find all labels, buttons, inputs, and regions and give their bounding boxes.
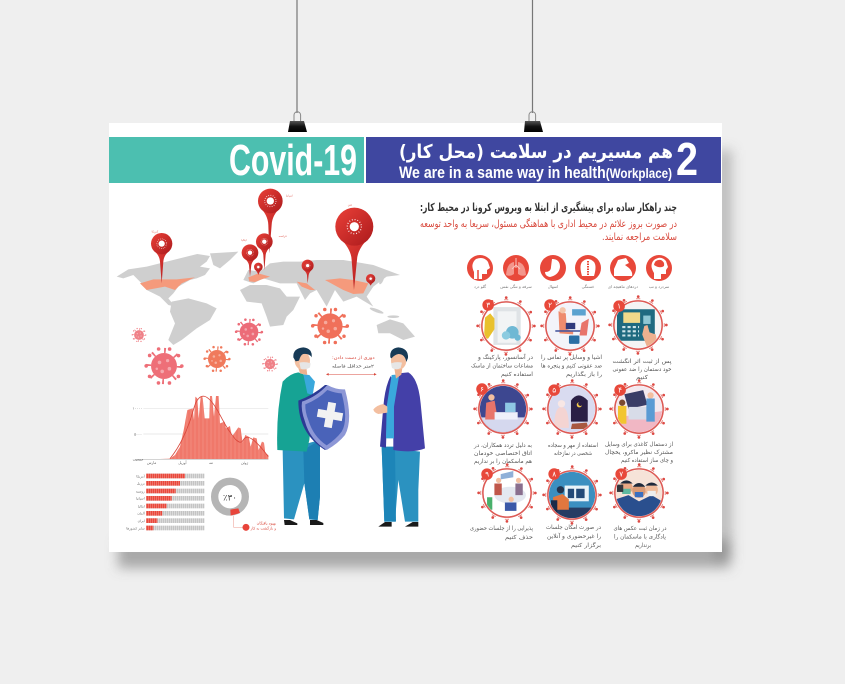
tip 2: disinfect objects: ۲ — [548, 301, 552, 310]
tip 3 caption: استفاده کنیم — [501, 371, 533, 378]
symptom: sore throat: گلو درد — [474, 284, 486, 289]
poster sheet — [109, 123, 722, 552]
horizontal bar chart: آلمان — [137, 512, 146, 516]
symptom: diarrhea — [540, 255, 566, 289]
tip 3 caption: مشاعات ساختمان از ماسک — [471, 362, 533, 370]
header: title: 2 — [676, 133, 698, 185]
world map: چین — [348, 204, 353, 207]
horizontal bar chart: اسپانیا — [136, 497, 145, 501]
tip 2 caption — [541, 355, 602, 378]
world map: اسپانیا — [286, 194, 293, 197]
tip 9 caption — [470, 526, 534, 541]
tip 8: online meeting — [544, 467, 600, 523]
distance note — [326, 355, 377, 376]
symptom: diarrhea: اسهال — [548, 284, 558, 289]
donut chart: و بازگشت به کار — [250, 526, 276, 531]
symptom icons — [467, 255, 672, 289]
illustration: two masked men with shield — [277, 347, 425, 527]
area chart: مه — [209, 461, 213, 465]
symptom: headache and fever — [646, 255, 672, 289]
tip 6: shared office: ۶ — [480, 385, 484, 394]
symptom: cough and shortness of breath — [500, 255, 532, 289]
symptom: cough and shortness of breath: سرفه و تنگی نفس — [500, 284, 532, 289]
tip 5 caption: استفاده از مهر و سجاده — [548, 443, 598, 449]
map pins — [151, 189, 375, 290]
donut chart: بهبود یافتگان — [257, 520, 276, 525]
tip 8: online meeting: ۸ — [552, 470, 556, 479]
tip 5: prayer room: ۵ — [552, 386, 556, 395]
tip 1: fingerprint device: ۱ — [617, 302, 621, 311]
horizontal bar chart: برزیل — [137, 482, 145, 486]
tip 1 caption: کنیم — [636, 374, 648, 381]
header: title: We are in a same way in health(Workplace) — [399, 163, 672, 182]
tip 4: shared kitchen: ۴ — [618, 386, 622, 395]
symptom: fatigue — [575, 255, 601, 289]
tip 4 caption — [605, 441, 673, 464]
tip 9 caption: حذف کنیم — [505, 534, 534, 541]
tip 6 caption: به دلیل تردد همکاران، در — [473, 442, 532, 449]
man on the left — [277, 347, 323, 525]
horizontal bar chart — [126, 474, 205, 530]
tip 4: shared kitchen — [611, 381, 667, 437]
tip 6 caption — [473, 442, 532, 465]
horizontal bar chart: سایر کشورها — [126, 526, 145, 530]
tip 3: elevator: ۳ — [486, 301, 490, 310]
tip 4 caption: و چای ساز استفاده کنیم — [621, 457, 673, 464]
area chart — [132, 396, 268, 465]
world map: ایتالیا — [241, 239, 247, 242]
intro paragraph — [420, 218, 677, 243]
header: title — [366, 133, 721, 185]
symptom: headache and fever: سردرد و تب — [649, 284, 670, 289]
area chart: ژوئن — [241, 461, 249, 465]
tip 5 caption: شخصی در نمازخانه — [554, 451, 592, 457]
symptom: sore throat — [467, 255, 493, 289]
horizontal bar chart: آمریکا — [136, 474, 146, 478]
horizontal bar chart: روسیه — [136, 489, 145, 493]
tip 7: group selfie: ۷ — [619, 470, 623, 479]
intro heading: چند راهکار ساده برای پیشگیری از ابتلا به ویروس کرونا در محیط کار: — [420, 201, 677, 214]
tip 8 caption: در صورت امکان جلسات — [546, 524, 601, 531]
tip 4 caption: از دستمال کاغذی برای وسایل — [605, 441, 673, 448]
tip 1 caption: پس از ثبت اثر انگشت — [612, 357, 672, 365]
tip 5 caption — [548, 443, 598, 457]
tip 2 caption: ضد عفونی کنیم و پنجره ها — [541, 362, 602, 370]
man on the right — [373, 347, 425, 527]
tip 6 caption: اتاق اختصاصی خودمان — [474, 451, 532, 457]
tip 7: group selfie — [611, 465, 667, 521]
virus particles — [132, 309, 347, 384]
distance note: ۲متر حداقل فاصله — [332, 365, 375, 370]
horizontal bar chart: ایران — [138, 519, 145, 523]
horizontal bar chart: ایتالیا — [138, 504, 145, 508]
hanging strings and clips — [288, 0, 543, 132]
donut chart: ٪۳۰ — [223, 494, 237, 504]
area chart: ۱۰۰۰۰ — [132, 406, 142, 410]
tip 3: elevator — [478, 298, 534, 354]
tip 9: no meeting catering — [479, 465, 535, 521]
shield with cross — [298, 385, 349, 450]
tip 7 caption: در زمان ثبت عکس های — [614, 525, 667, 532]
header: title: هم مسیریم در سلامت (محل کار) — [399, 141, 673, 163]
world map — [117, 189, 415, 345]
tip 4 caption: مشترک نظیر ماکرو، یخچال — [605, 449, 673, 456]
header: Covid-19 — [109, 136, 364, 185]
symptom: muscle pain — [608, 255, 638, 289]
tip 7 caption — [614, 525, 667, 549]
donut chart — [215, 481, 276, 531]
area chart: ۵۰۰۰ — [134, 432, 142, 436]
symptom: muscle pain: دردهای ماهیچه ای — [608, 284, 638, 289]
tip 9 caption: پذیرایی را از جلسات حضوری — [470, 526, 533, 532]
tip 1 caption: خود دستمان را ضد عفونی — [612, 367, 672, 373]
tip 6: shared office — [475, 381, 531, 437]
tip 7 caption: یادگاری با ماسکمان را — [614, 532, 666, 540]
tip 3 caption: در آسانسور، پارکینگ و — [477, 353, 534, 361]
tip 2 caption: را باز بگذاریم — [566, 370, 602, 378]
tip 2 caption: اشیا و وسایل پر تماس را — [541, 355, 602, 361]
area chart: جمعیت — [133, 458, 143, 462]
tip 7 caption: برنداریم — [635, 543, 651, 549]
poster shadow — [118, 150, 732, 568]
tip 3 caption — [471, 353, 534, 378]
area chart: مارس — [147, 461, 156, 465]
distance note: دوری از دست دادن: — [332, 355, 375, 361]
tip 6 caption: هم ماسکمان را بر نداریم — [474, 458, 532, 465]
intro paragraph: سلامت مراجعه نمایند. — [602, 232, 677, 243]
tip 5: prayer room — [544, 381, 600, 437]
area chart: آوریل — [178, 460, 187, 465]
symptom: fatigue: خستگی — [582, 284, 595, 289]
tip 9: no meeting catering: ۹ — [485, 470, 489, 479]
header: Covid-19: Covid-19 — [229, 136, 357, 185]
tip 1 caption — [612, 357, 672, 381]
tip 8 caption — [546, 524, 601, 549]
tip 2: disinfect objects — [542, 298, 598, 354]
tip 8 caption: را غیرحضوری و آنلاین — [547, 533, 601, 540]
world map: فرانسه — [279, 235, 287, 238]
tip 8 caption: برگزار کنیم — [571, 541, 601, 549]
world map: آمریکا — [151, 230, 159, 234]
tip 1: fingerprint device — [610, 297, 666, 353]
intro paragraph: در صورت بروز علائم در محیط اداری با هماهنگی مسئول، سریعا به واحد توسعه — [420, 218, 677, 230]
